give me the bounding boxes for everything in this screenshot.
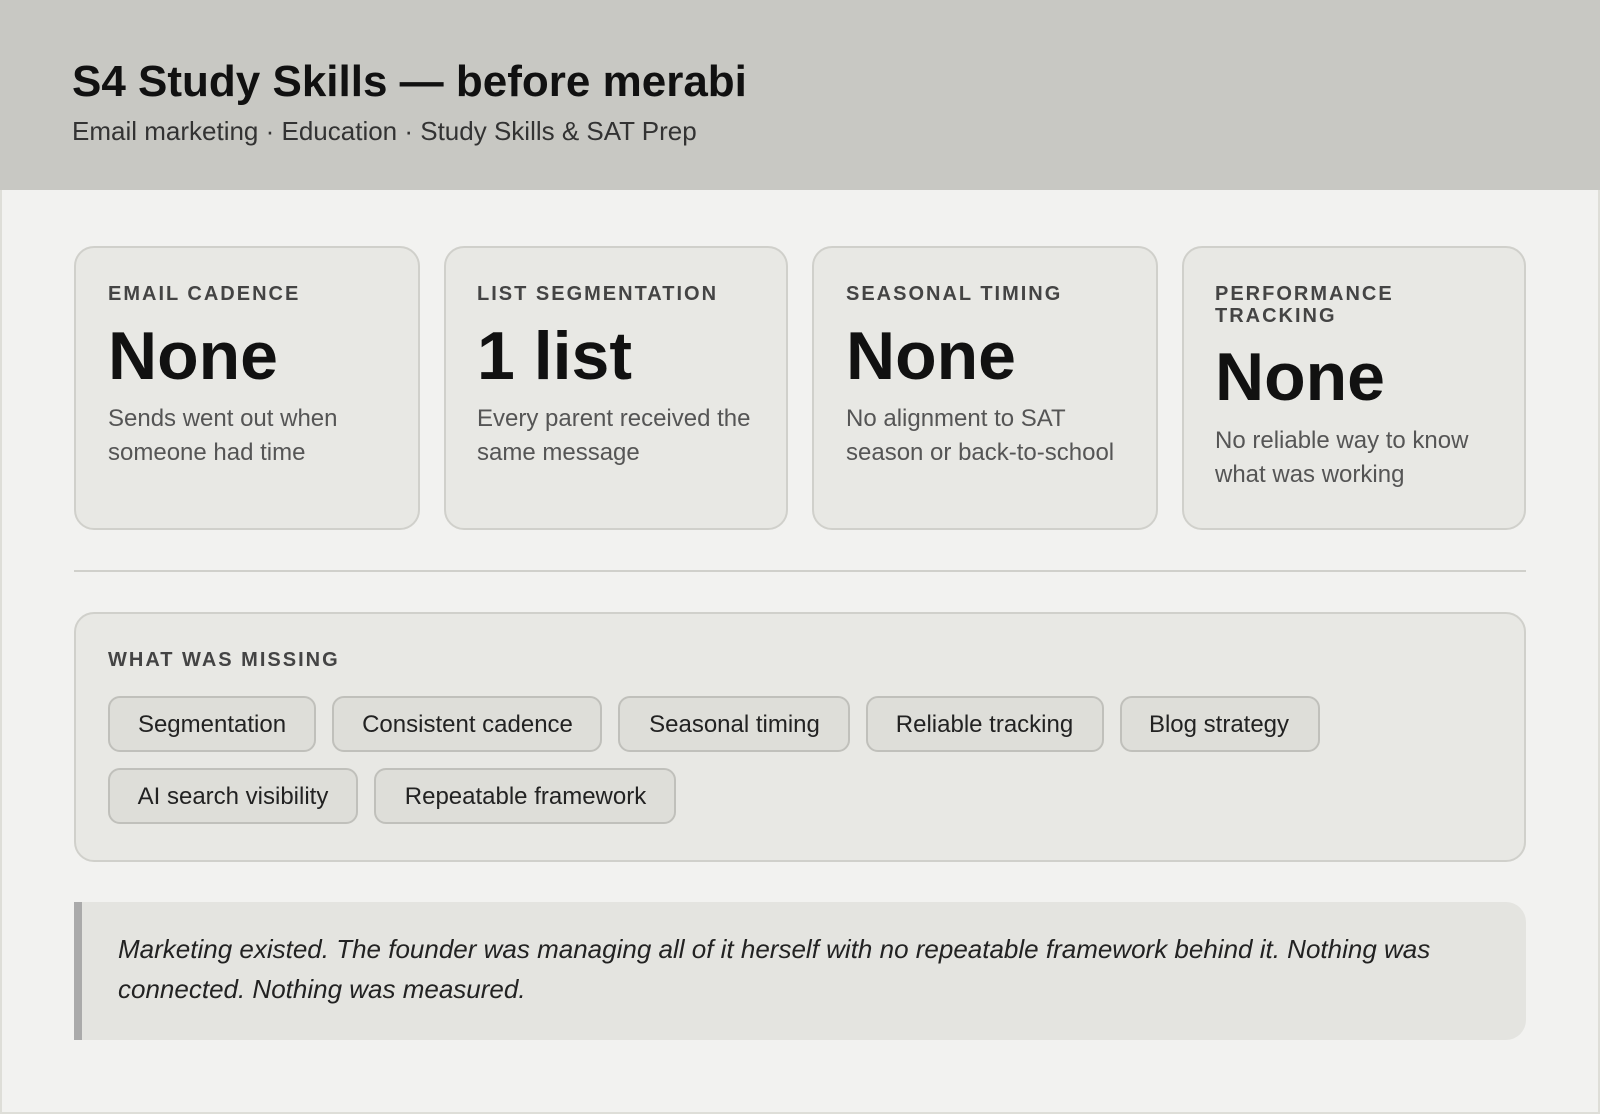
card value: None bbox=[846, 318, 1016, 394]
panel: list segmentation bbox=[444, 246, 788, 530]
title: S4 Study Skills — before merabi bbox=[72, 57, 747, 106]
callout quote: Marketing existed. The founder was managing all of it herself with no repeatable framework behind it. Nothing was connected. Nothing was measured. bbox=[118, 934, 1430, 1004]
chip: Consistent cadence bbox=[362, 711, 573, 738]
panel heading: WHAT WAS MISSING bbox=[108, 649, 340, 671]
card value: None bbox=[108, 318, 278, 394]
callout quote bbox=[74, 902, 1526, 1040]
header band bbox=[0, 0, 1600, 190]
chip: Reliable tracking bbox=[896, 711, 1073, 738]
card label: EMAIL CADENCE bbox=[108, 283, 300, 305]
stat cards row bbox=[74, 246, 1526, 530]
panel: performance tracking bbox=[1182, 246, 1526, 530]
chip bbox=[618, 696, 850, 752]
card label: SEASONAL TIMING bbox=[846, 283, 1062, 305]
missing items chips bbox=[108, 696, 1320, 824]
chip: Seasonal timing bbox=[649, 711, 820, 738]
card label: LIST SEGMENTATION bbox=[477, 283, 718, 305]
card description: Every parent received the same message bbox=[477, 405, 750, 466]
chip: Repeatable framework bbox=[405, 783, 646, 810]
chip: AI search visibility bbox=[138, 783, 328, 810]
card value: 1 list bbox=[477, 318, 632, 394]
chip bbox=[108, 768, 358, 824]
chip bbox=[332, 696, 602, 752]
card value: None bbox=[1215, 339, 1385, 415]
card description: No reliable way to know what was working bbox=[1215, 427, 1468, 488]
chip: Segmentation bbox=[138, 711, 286, 738]
chip bbox=[866, 696, 1104, 752]
card description: No alignment to SAT season or back-to-school bbox=[846, 405, 1114, 466]
chip: Blog strategy bbox=[1149, 711, 1289, 738]
panel: email cadence bbox=[74, 246, 420, 530]
card label: PERFORMANCE TRACKING bbox=[1215, 283, 1394, 327]
chip bbox=[108, 696, 316, 752]
panel: what was missing bbox=[74, 612, 1526, 862]
subtitle: Email marketing · Education · Study Skills & SAT Prep bbox=[72, 116, 697, 146]
panel: seasonal timing bbox=[812, 246, 1158, 530]
chip bbox=[374, 768, 676, 824]
chip bbox=[1120, 696, 1320, 752]
card description: Sends went out when someone had time bbox=[108, 405, 338, 466]
